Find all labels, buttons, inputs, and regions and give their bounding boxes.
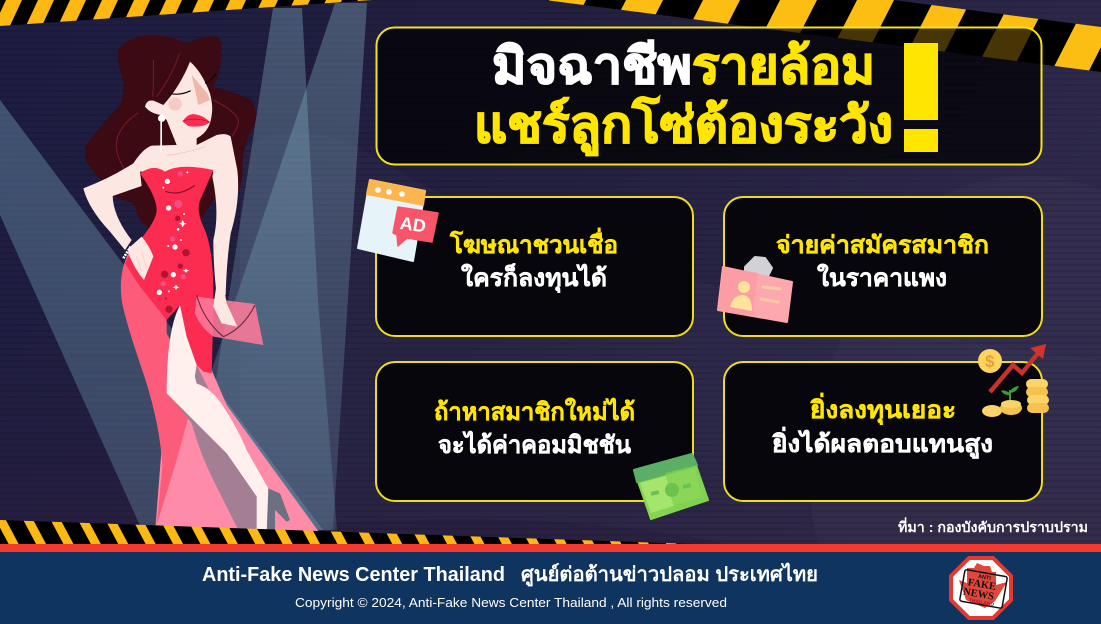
title line 2: แชร์ลูกโซ่ต้องระวัง [474, 95, 893, 156]
footer organisation name: Anti-Fake News Center Thailand [202, 564, 505, 586]
card 3 text: จะได้ค่าคอมมิชชัน [438, 430, 632, 459]
logo: anti fake news stop sign: FAKE [967, 577, 997, 593]
icon: banknotes [634, 454, 708, 519]
title panel [376, 28, 1042, 164]
skin: arms and torso [83, 120, 238, 295]
lips [183, 114, 210, 127]
card 4 heading: ยิ่งลงทุนเยอะ [810, 392, 956, 426]
card 2 text: ในราคาแพง [817, 263, 947, 292]
cheek [168, 97, 182, 111]
woman in red dress illustration [83, 35, 320, 533]
card 2 heading: จ่ายค่าสมัครสมาชิก [776, 232, 989, 259]
skirt right side [197, 365, 320, 533]
nose [192, 75, 210, 105]
logo: anti fake news stop sign: THAILAND [968, 598, 995, 608]
bracelet [123, 247, 131, 258]
sequins [157, 171, 189, 295]
panel: card 3 commission [376, 362, 693, 501]
coin stacks [982, 379, 1049, 417]
icon: id card [718, 257, 792, 322]
panel: card 4 high returns [724, 362, 1042, 501]
spotlight beams [0, 3, 367, 530]
logo: anti fake news stop sign: ANTI [978, 574, 992, 582]
icon: ad browser window: AD [399, 213, 427, 236]
hand on hip [128, 237, 153, 280]
hair [85, 35, 257, 230]
panel: card 2 membership fee [724, 197, 1042, 336]
top left caution tape [0, 0, 372, 26]
top right caution tape [545, 0, 1101, 72]
card 1 text: ใครก็ลงทุนได้ [461, 263, 607, 294]
dollar coin: $ [985, 352, 995, 371]
card 1 heading: โฆษณาชวนเชื่อ [449, 227, 618, 259]
card 4 text: ยิ่งได้ผลตอบแทนสูง [772, 426, 993, 459]
bottom caution tape [0, 520, 693, 544]
exclamation mark [904, 43, 938, 152]
leg shadow [177, 403, 257, 533]
title line 1 yellow: รายล้อม [692, 38, 875, 94]
bust line and collar bones [165, 185, 195, 193]
plant [1001, 386, 1019, 401]
shoe [267, 488, 290, 533]
footer thai name: ศูนย์ต่อต้านข่าวปลอม ประเทศไทย [521, 562, 818, 588]
eyes [168, 73, 216, 94]
skirt mid pink [121, 253, 197, 525]
clutch bag [195, 278, 263, 345]
copyright: Copyright © 2024, Anti-Fake News Center Thailand , All rights reserved [295, 595, 727, 610]
logo: anti fake news stop sign: NEWS [962, 587, 995, 603]
icon: ad browser window [358, 180, 438, 261]
footer [0, 552, 1101, 624]
bodice and red dress [125, 167, 213, 373]
hair strands [116, 53, 238, 170]
title line 1 white: มิจฉาชีพ [492, 38, 692, 94]
card 3 heading: ถ้าหาสมาชิกใหม่ได้ [434, 397, 635, 426]
logo: anti fake news stop sign [951, 558, 1011, 618]
panel: card 1 advertising [376, 197, 693, 336]
source credit: ที่มา : กองบังคับการปราบปราม [898, 517, 1088, 535]
leg [167, 305, 268, 533]
red divider band [0, 544, 1101, 552]
skirt light pink underlay [155, 383, 243, 533]
earring [158, 115, 165, 152]
icon: coins and rising arrow [978, 344, 1049, 417]
face [145, 62, 216, 152]
